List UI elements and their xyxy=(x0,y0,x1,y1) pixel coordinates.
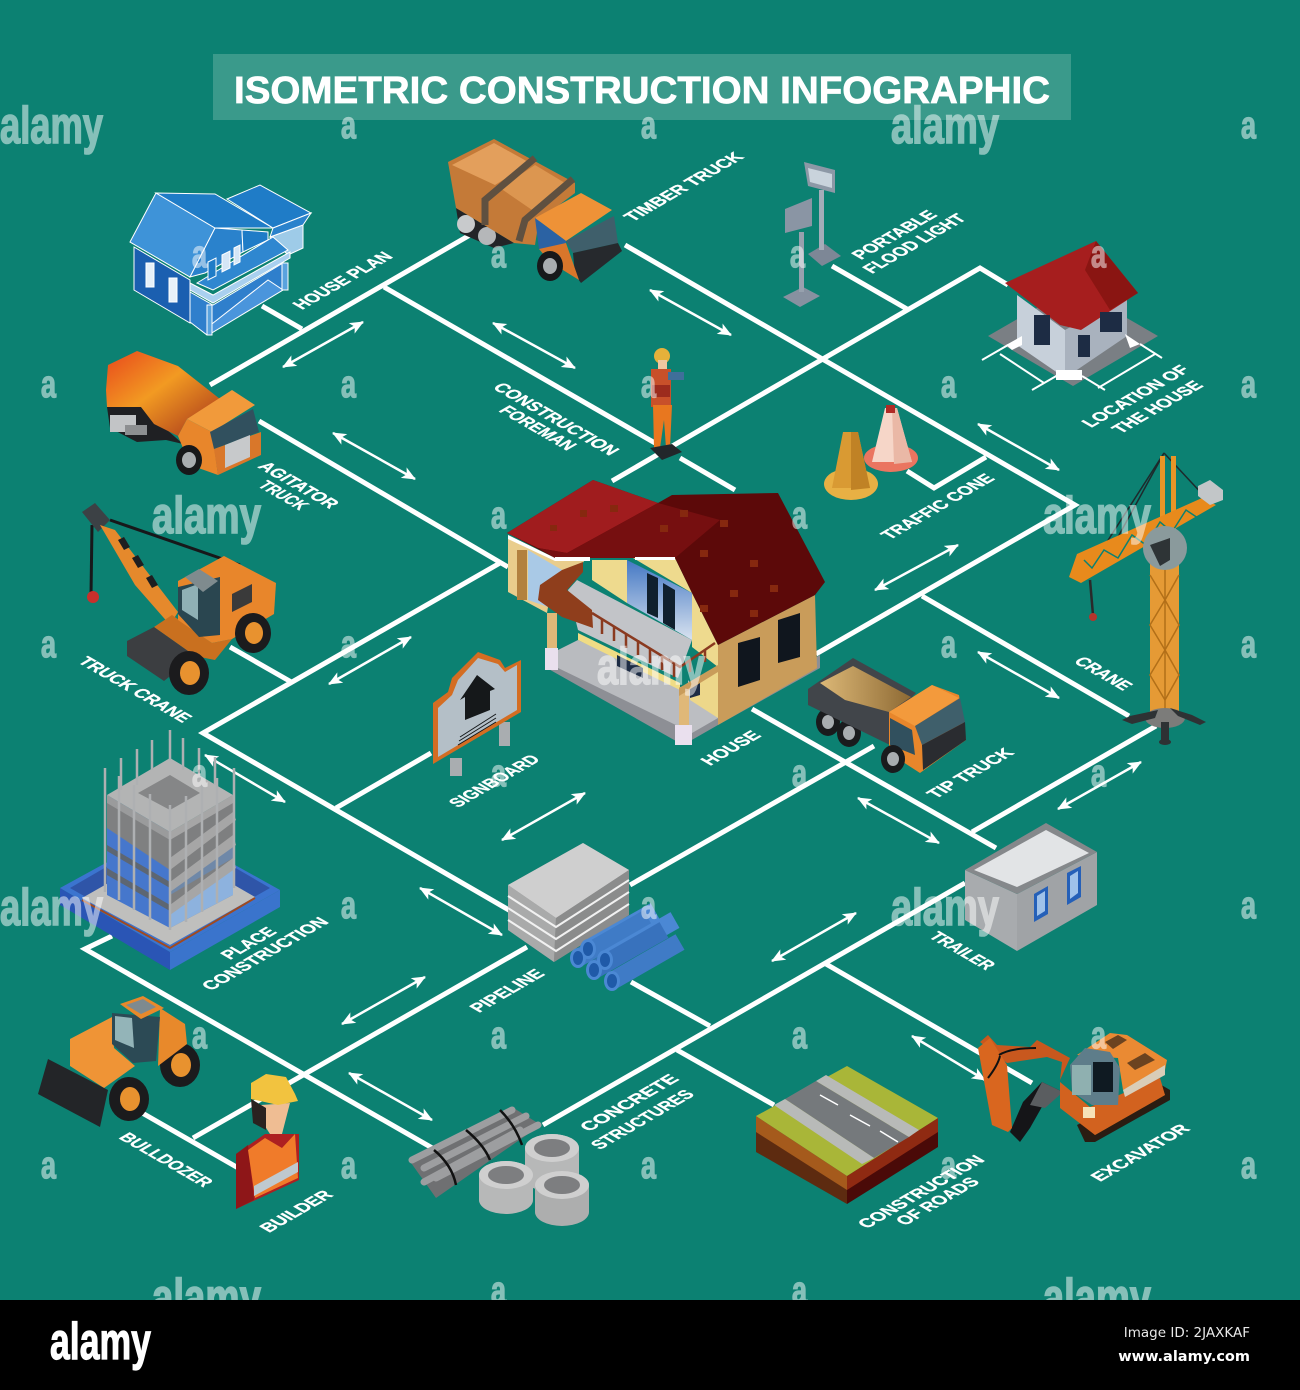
watermarks: a xyxy=(941,1145,957,1187)
watermarks: a xyxy=(641,105,657,147)
watermarks: a xyxy=(1241,364,1257,406)
label: agitator truck: AGITATOR xyxy=(254,459,344,511)
label: portable flood light: FLOOD LIGHT xyxy=(858,211,971,276)
icon: truck crane xyxy=(82,503,276,695)
watermarks: a xyxy=(1241,624,1257,666)
watermarks: a xyxy=(41,364,57,406)
icon: house plan xyxy=(130,185,311,335)
watermarks: a xyxy=(491,753,507,795)
watermarks: a xyxy=(941,364,957,406)
label: timber truck: TIMBER TRUCK xyxy=(619,149,748,224)
watermarks: a xyxy=(790,234,806,276)
label: portable flood light: PORTABLE xyxy=(847,207,942,262)
icon: timber truck xyxy=(448,139,622,283)
watermarks: alamy xyxy=(597,638,705,696)
watermarks: a xyxy=(41,1145,57,1187)
watermarks: a xyxy=(792,495,808,537)
watermarks: a xyxy=(491,1015,507,1057)
label: place construction: CONSTRUCTION xyxy=(197,914,333,993)
footer bar xyxy=(0,1300,1300,1390)
footer logo: alamy xyxy=(50,1313,151,1371)
icon: excavator xyxy=(978,1033,1170,1142)
label: builder: BUILDER xyxy=(255,1187,337,1235)
watermarks: alamy xyxy=(0,97,103,155)
bottom clipped watermarks: a xyxy=(491,1270,507,1312)
watermarks: a xyxy=(341,105,357,147)
watermarks: a xyxy=(1241,105,1257,147)
label: signboard: SIGNBOARD xyxy=(444,752,545,810)
arrow: construction foreman xyxy=(493,323,575,368)
icon: signboard xyxy=(433,652,521,776)
arrow: place construction xyxy=(205,755,285,802)
arrow: tip truck xyxy=(858,798,939,843)
label: construction foreman: FOREMAN xyxy=(495,403,581,453)
watermarks: a xyxy=(641,364,657,406)
arrow: signboard xyxy=(502,793,585,840)
label: concrete structures: CONCRETE xyxy=(575,1071,683,1134)
label: concrete structures: STRUCTURES xyxy=(586,1087,699,1152)
watermarks: a xyxy=(341,364,357,406)
label: truck crane: TRUCK CRANE xyxy=(74,654,197,725)
arrow: truck crane xyxy=(329,637,411,684)
watermarks: a xyxy=(1091,234,1107,276)
watermarks: a xyxy=(491,234,507,276)
bottom clipped watermarks xyxy=(152,1269,1152,1327)
bottom clipped watermarks: a xyxy=(792,1270,808,1312)
arrow: pipeline left xyxy=(420,888,502,935)
watermarks: a xyxy=(192,1015,208,1057)
icon: agitator truck xyxy=(106,351,261,475)
arrow: excavator xyxy=(912,1036,985,1080)
icon: bulldozer xyxy=(38,996,200,1127)
watermarks: alamy xyxy=(1043,487,1151,545)
icon: tip truck xyxy=(808,658,966,773)
label: trailer: TRAILER xyxy=(925,929,1000,973)
watermarks: a xyxy=(792,753,808,795)
icon: builder xyxy=(236,1074,299,1209)
footer image id: Image ID: 2JAXKAF xyxy=(1124,1325,1250,1341)
label: pipeline: PIPELINE xyxy=(465,966,549,1015)
watermarks: a xyxy=(41,624,57,666)
arrow: agitator truck xyxy=(333,433,415,479)
icon: place construction xyxy=(60,730,280,970)
label: location of the house: THE HOUSE xyxy=(1107,378,1208,436)
watermarks: a xyxy=(1241,1145,1257,1187)
bottom clipped watermarks: alamy xyxy=(152,1269,261,1327)
label: house plan: HOUSE PLAN xyxy=(288,249,397,312)
label: location of the house: LOCATION OF xyxy=(1077,362,1194,430)
watermarks: a xyxy=(341,624,357,666)
label: tip truck: TIP TRUCK xyxy=(922,745,1018,801)
watermarks: a xyxy=(341,1145,357,1187)
watermarks: alamy xyxy=(891,97,999,155)
icon: crane xyxy=(1069,453,1223,745)
label: house: HOUSE xyxy=(696,728,765,768)
footer website: www.alamy.com xyxy=(1118,1349,1250,1365)
title banner xyxy=(213,54,1071,120)
watermarks: a xyxy=(491,495,507,537)
arrow: trailer to crane xyxy=(1058,762,1141,809)
arrow: timber truck xyxy=(650,290,731,335)
label: construction of roads: OF ROADS xyxy=(891,1174,984,1228)
label: bulldozer: BULLDOZER xyxy=(115,1130,218,1190)
icon: concrete structures xyxy=(409,1107,589,1226)
arrow: location of house xyxy=(978,424,1059,470)
label: construction foreman: CONSTRUCTION xyxy=(489,380,624,458)
watermarks: alamy xyxy=(152,487,261,545)
connector lines xyxy=(85,235,1156,1169)
watermarks: a xyxy=(641,885,657,927)
watermarks xyxy=(0,97,1257,1187)
watermarks: a xyxy=(792,1015,808,1057)
arrow: house plan to agitator truck xyxy=(283,322,363,367)
arrow: traffic cone xyxy=(875,545,958,590)
arrow: crane xyxy=(978,652,1059,698)
label: excavator: EXCAVATOR xyxy=(1086,1121,1194,1184)
icon: construction of roads xyxy=(756,1066,938,1204)
label: construction of roads: CONSTRUCTION xyxy=(853,1152,989,1231)
watermarks: a xyxy=(192,753,208,795)
icon: construction foreman xyxy=(650,348,684,460)
watermarks: alamy xyxy=(891,879,999,937)
title: ISOMETRIC CONSTRUCTION INFOGRAPHIC xyxy=(234,70,1050,112)
arrow: concrete structures xyxy=(349,1073,432,1120)
icon: portable flood light xyxy=(783,162,841,307)
icon: house xyxy=(507,480,825,745)
label: place construction: PLACE xyxy=(216,924,281,962)
label: agitator truck: TRUCK xyxy=(254,478,313,513)
watermarks: a xyxy=(192,234,208,276)
icon: traffic cone xyxy=(824,405,918,500)
icon: trailer xyxy=(965,823,1097,951)
watermarks: a xyxy=(1241,885,1257,927)
watermarks: a xyxy=(941,624,957,666)
icon: pipeline xyxy=(508,843,680,991)
icon: location of the house xyxy=(982,241,1162,390)
watermarks: a xyxy=(341,885,357,927)
watermarks: a xyxy=(1091,753,1107,795)
arrow: pipeline lower xyxy=(342,977,425,1024)
arrow: trailer lower xyxy=(772,913,856,961)
watermarks: a xyxy=(641,1145,657,1187)
watermarks: a xyxy=(1091,1015,1107,1057)
watermarks: alamy xyxy=(0,879,103,937)
label: traffic cone: TRAFFIC CONE xyxy=(876,471,999,542)
label: crane: CRANE xyxy=(1070,654,1137,693)
